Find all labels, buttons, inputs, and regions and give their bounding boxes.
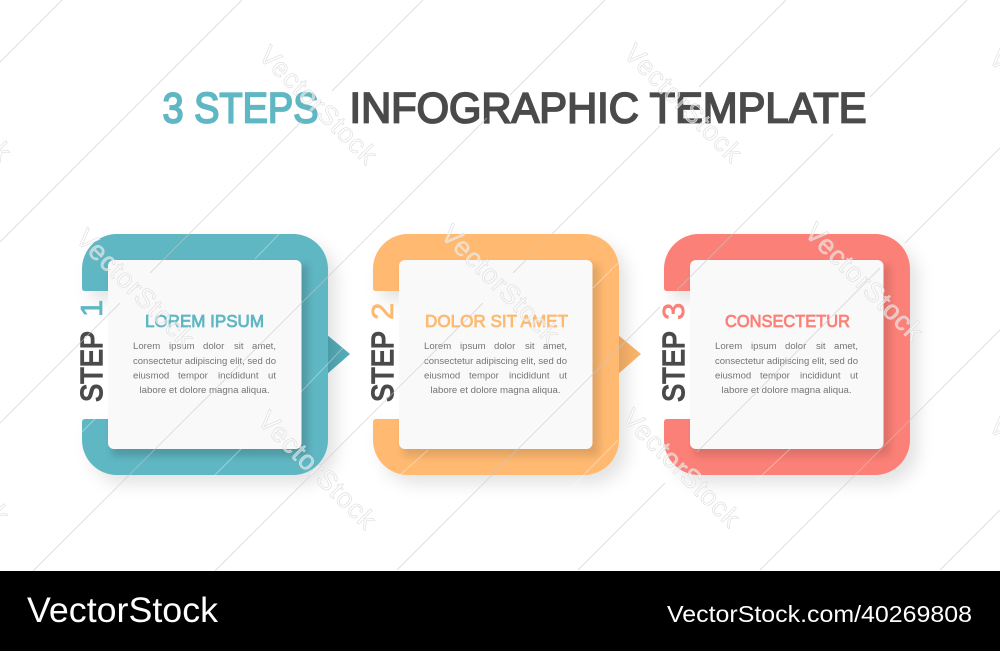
body text: step 2: ipsum — [460, 341, 486, 352]
body text: step 2: consectetur adipiscing elit, sed do — [424, 356, 567, 367]
body text: step 3: eiusmod — [715, 370, 751, 382]
card: step 2 — [399, 260, 592, 449]
watermark: bottom row: VectorStock — [616, 403, 746, 533]
step label: step 1: STEP — [74, 331, 109, 402]
frame: step 3 — [664, 234, 910, 475]
body text: step 3: tempor — [760, 370, 791, 382]
body text: step 3: consectetur adipiscing elit, sed do — [715, 356, 858, 367]
watermark: top row: VectorStock — [253, 40, 383, 170]
step label: step 2: 2 — [365, 303, 400, 320]
title: 3 STEPS — [162, 86, 318, 132]
step label: step 1: 1 — [74, 300, 109, 317]
body text: step 3: Lorem — [715, 341, 742, 352]
watermark: bottom row — [0, 400, 1000, 541]
body text: step 2: Lorem — [424, 341, 451, 352]
card shadow: step 2 — [403, 265, 599, 456]
body text: step 2: sit — [525, 341, 535, 352]
watermark: middle row: VectorStock — [799, 217, 929, 347]
body text: step 1: Lorem — [133, 341, 160, 352]
body text: step 1: eiusmod — [133, 370, 169, 382]
card: step 1 — [108, 260, 302, 449]
body text: step 1: tempor — [178, 370, 209, 382]
body text: step 3: ipsum — [751, 341, 777, 352]
title: INFOGRAPHIC TEMPLATE — [350, 86, 866, 132]
watermark: middle row: VectorStock — [70, 223, 200, 353]
body text: step 1: dolor — [203, 341, 225, 352]
watermark: middle row: VectorStock — [435, 219, 565, 349]
panel: step 3 — [656, 234, 910, 475]
card shadow: step 3 — [694, 265, 890, 456]
body text: step 2: amet, — [543, 341, 567, 352]
arrow: step 1 to step 2 — [326, 334, 350, 375]
body text: step 1: sit — [234, 341, 244, 352]
footer image id: VectorStock.com/40269808 — [667, 601, 972, 627]
body text: step 2: incididunt — [509, 370, 550, 382]
heading: consectetur: CONSECTETUR — [725, 311, 850, 331]
watermark: bottom row: VectorStock — [252, 405, 382, 535]
body text: step 3: amet, — [834, 341, 858, 352]
frame: step 1 — [82, 234, 328, 475]
card: step 3 — [690, 260, 884, 449]
body text: step 1: amet, — [252, 341, 276, 352]
body text: step 3: sit — [816, 341, 826, 352]
body text: step 1: ut — [268, 370, 276, 382]
body text: step 3: dolor — [785, 341, 807, 352]
step label: step 3: 3 — [656, 303, 691, 320]
step label: step 3: STEP — [656, 331, 691, 402]
body text: step 2: tempor — [469, 370, 500, 382]
body text: step 3: labore et dolore magna aliqua. — [722, 385, 852, 396]
step label: step 2: STEP — [365, 331, 400, 402]
body text: step 2: ut — [559, 370, 567, 382]
watermark: top row: VectorStock — [618, 38, 748, 168]
body text: step 3: incididunt — [800, 370, 841, 382]
body text: step 2: eiusmod — [424, 370, 460, 382]
body text: step 3: ut — [850, 370, 858, 382]
watermark: top row — [0, 37, 1000, 173]
footer brand: VectorStock — [27, 591, 219, 630]
body text: step 1: labore et dolore magna aliqua. — [140, 385, 270, 396]
body text: step 2: labore et dolore magna aliqua. — [430, 385, 560, 396]
watermark: middle row — [70, 217, 929, 353]
body text: step 2: dolor — [494, 341, 516, 352]
body text: step 1: incididunt — [218, 370, 259, 382]
panel: step 1 — [74, 234, 350, 475]
heading: dolor sit amet: DOLOR SIT AMET — [425, 311, 568, 331]
arrow: step 2 to step 3 — [617, 334, 641, 375]
heading: lorem ipsum: LOREM IPSUM — [145, 311, 264, 331]
frame: step 2 — [373, 234, 619, 475]
body text: step 1: consectetur adipiscing elit, sed do — [133, 356, 276, 367]
body text: step 1: ipsum — [169, 341, 195, 352]
footer bar — [0, 571, 1000, 651]
panel: step 2 — [365, 234, 641, 475]
card shadow: step 1 — [112, 265, 308, 456]
